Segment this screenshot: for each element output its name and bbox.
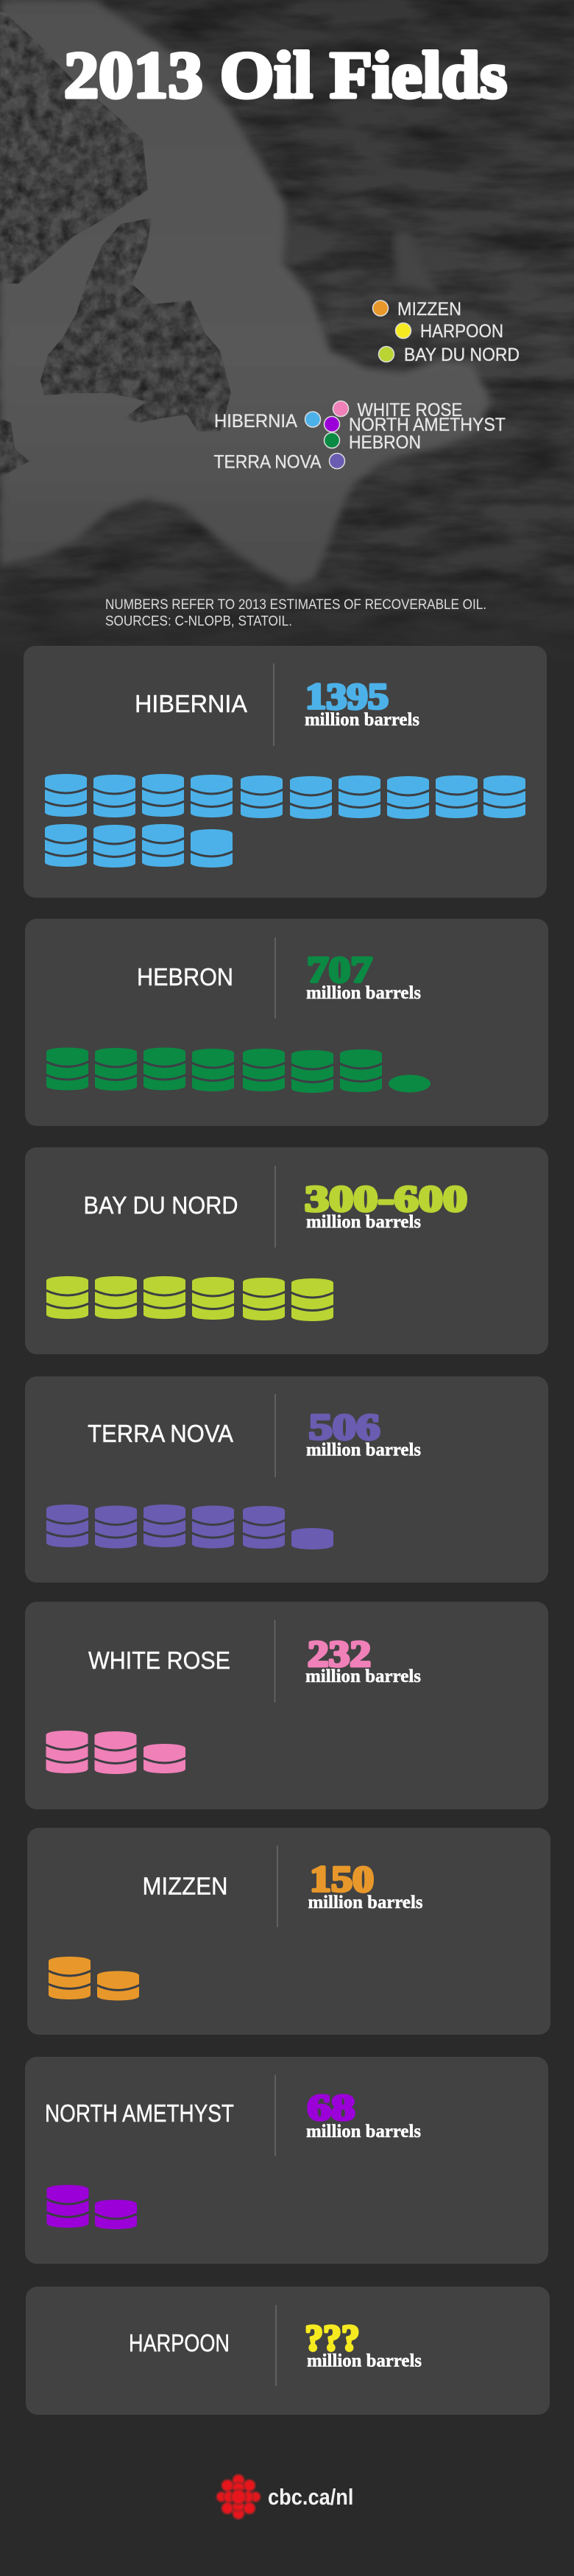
barrels: Hibernia, 14 stacks [44, 774, 526, 868]
panel: North Amethyst [25, 2057, 548, 2264]
footer url: cbc.ca/nl [268, 2484, 353, 2510]
label: Mizzen: MIZZEN [397, 299, 461, 320]
barrels: North Amethyst, 2 stacks [46, 2185, 138, 2229]
field name: White Rose: WHITE ROSE [88, 1647, 230, 1674]
unit: million barrels: million barrels [305, 710, 419, 730]
label: Terra Nova: TERRA NOVA [213, 452, 322, 473]
map markers and labels [213, 299, 520, 473]
marker: Terra Nova [330, 454, 344, 468]
panel: Bay du Nord [25, 1147, 548, 1354]
panel: White Rose [25, 1602, 548, 1809]
value: 232: 232 [308, 1633, 371, 1674]
label: Harpoon: HARPOON [420, 321, 503, 342]
barrels: Hebron, 8 stacks [46, 1047, 431, 1093]
value: 300-600: 300-600 [305, 1178, 467, 1219]
icon: CBC gem [216, 2474, 261, 2519]
panel: Mizzen [27, 1828, 550, 2035]
title: 2013 Oil Fields [64, 39, 507, 112]
barrels: White Rose, 3 stacks [46, 1731, 186, 1774]
barrels: Bay du Nord, 6 stacks [46, 1276, 334, 1321]
unit: million barrels: million barrels [307, 2351, 422, 2371]
marker: Bay du Nord [378, 346, 394, 362]
unit: million barrels: million barrels [306, 1212, 421, 1232]
field name: Mizzen: MIZZEN [143, 1872, 228, 1900]
map background [0, 0, 574, 685]
source note: NUMBERS REFER TO 2013 ESTIMATES OF RECOVERABLE OIL. [105, 597, 486, 613]
value: 506: 506 [309, 1406, 380, 1447]
field name: Bay du Nord: BAY DU NORD [84, 1192, 238, 1219]
source note [105, 597, 486, 629]
field name: Harpoon: HARPOON [129, 2329, 230, 2357]
panel: Terra Nova [25, 1376, 548, 1583]
marker: White Rose [333, 401, 349, 417]
value: 707: 707 [307, 949, 372, 990]
marker: Hibernia [305, 412, 321, 427]
marker: Harpoon [396, 323, 411, 339]
unit: million barrels: million barrels [306, 983, 421, 1003]
unit: million barrels: million barrels [308, 1893, 423, 1912]
value: 68: 68 [308, 2086, 355, 2128]
marker: North Amethyst [324, 417, 340, 432]
label: Hibernia: HIBERNIA [214, 411, 297, 432]
label: White Rose: WHITE ROSE [358, 400, 462, 420]
marker: Hebron [324, 433, 340, 448]
barrels: Mizzen, 2 stacks [48, 1957, 140, 2000]
label: Bay du Nord: BAY DU NORD [404, 345, 520, 365]
panel: Hibernia [24, 646, 547, 898]
source note: SOURCES: C-NLOPB, STATOIL. [105, 614, 292, 629]
field name: Hibernia: HIBERNIA [135, 690, 247, 717]
panel: Harpoon [26, 2287, 550, 2415]
panel: Hebron [25, 919, 548, 1126]
unit: million barrels: million barrels [305, 1667, 421, 1686]
marker: Mizzen [372, 300, 389, 316]
value: 150: 150 [310, 1858, 374, 1899]
unit: million barrels: million barrels [306, 1440, 421, 1460]
field name: Terra Nova: TERRA NOVA [88, 1420, 233, 1447]
value: 1395: 1395 [305, 675, 389, 717]
label: Hebron: HEBRON [349, 432, 421, 453]
label: North Amethyst: NORTH AMETHYST [349, 415, 506, 435]
barrels: Terra Nova, 6 stacks [46, 1505, 333, 1549]
field name: Hebron: HEBRON [137, 963, 233, 990]
field name: North Amethyst: NORTH AMETHYST [45, 2100, 234, 2127]
unit: million barrels: million barrels [306, 2122, 421, 2142]
footer logo [216, 2474, 353, 2519]
value: unknown: ??? [305, 2317, 359, 2358]
